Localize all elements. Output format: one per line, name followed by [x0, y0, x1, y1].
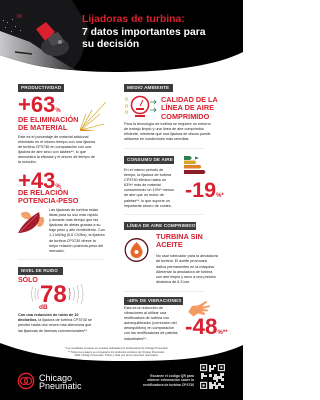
logo wordmark: Pneumatic	[39, 381, 82, 391]
footer notes: 2020 Chicago Pneumatic. Todos y cada uno de los derechos reservados.	[74, 354, 158, 357]
tag: -48% de vibraciones	[124, 297, 183, 305]
heading: de eliminación de material: DE ELIMINACIÓN	[18, 115, 78, 124]
footer notes: * Los resultados se basan en pruebas realizadas por el laboratorio de Chicago Pneumatic.	[65, 347, 168, 350]
logo: chicago pneumatic	[18, 372, 82, 391]
heading: de relación potencia-peso: DE RELACIÓN	[18, 188, 68, 197]
stat: +63%: +63%	[18, 92, 61, 117]
tag: consumo de aire	[124, 156, 174, 164]
text: productividad: de turbina CP3730 en comparación con una	[18, 145, 91, 149]
title	[82, 14, 206, 50]
text: potencia-peso: mejor relación potencia-peso del	[49, 244, 103, 248]
label: dB: dB	[39, 304, 48, 311]
qr caption: rectificadora de turbina CP3730	[143, 383, 194, 387]
qr caption: obtener información sobre la	[147, 378, 194, 382]
text: línea de aire comprimido: Alimentar la amoladora de turbina	[156, 270, 212, 274]
text: potencia-peso: listas para su uso más rápido	[49, 213, 98, 217]
text: productividad: demuestra la eficacia y el ahorro de tiempo de	[18, 155, 95, 159]
tag: medio ambiente: MEDIO AMBIENTE	[127, 85, 169, 90]
text: consumo de aire: importante ahorro de costes.	[124, 204, 172, 208]
text: medio ambiente	[124, 122, 211, 141]
text: vibraciones: rectificadora de turbina con	[124, 316, 169, 320]
text: consumo de aire: En el mismo periodo de	[124, 168, 163, 172]
text: potencia-peso: y durante más tiempo que las	[49, 218, 98, 222]
text: vibraciones: vibraciones al utilizar una	[124, 311, 166, 315]
text: nivel de ruido	[18, 313, 92, 333]
tag: consumo de aire: CONSUMO DE AIRE	[127, 157, 173, 162]
stat: -48%: -48%**	[185, 314, 228, 339]
text: consumo de aire: 63%* más de material	[124, 183, 161, 187]
icon: sparks	[80, 102, 106, 131]
heading: de relación potencia-peso: POTENCIA-PESO	[18, 196, 78, 205]
text: nivel de ruido: Con una reducción de ruido de 10	[18, 313, 78, 317]
qr code	[200, 364, 225, 389]
heading: calidad de la línea de aire comprimido	[161, 95, 218, 121]
icon: gauge	[124, 96, 156, 117]
text: medio ambiente: utilizarse en condiciones más sencillas.	[124, 137, 189, 141]
logo mark	[18, 372, 34, 390]
text: línea de aire comprimido: dinámica de 6,3 bar.	[156, 280, 190, 284]
text: nivel de ruido: decibelios, la lijadora de turbina CP3730 se	[18, 318, 92, 322]
panel: vibraciones	[124, 297, 228, 341]
title: su decisión	[82, 39, 139, 50]
logo wordmark: Chicago	[39, 373, 72, 383]
tag: medio ambiente	[124, 84, 173, 92]
stat: -19%: -19%*	[185, 178, 224, 202]
tag: línea de aire comprimido: LÍNEA DE AIRE COMPRIMIDO	[127, 223, 196, 228]
title: Lijadoras de turbina:	[82, 14, 185, 25]
text: productividad	[18, 135, 96, 164]
qr caption	[143, 374, 194, 387]
text: vibraciones: desequilibrio) en comparación	[124, 326, 174, 330]
icon: hand	[188, 300, 210, 316]
text: productividad: la solución.	[18, 160, 37, 164]
text: nivel de ruido: percibe hasta dos veces más silenciosa que	[18, 323, 91, 327]
text: productividad: eliminado en el mismo tiempo con una lijadora	[18, 140, 95, 144]
text: potencia-peso: mercado.	[49, 249, 65, 253]
text: línea de aire comprimido: daños permanentes en la máquina.	[156, 265, 215, 269]
heading: de eliminación de material	[18, 115, 78, 132]
icon: sound waves	[31, 284, 84, 304]
stat: +43%: +43%	[18, 168, 61, 193]
panel: consumo de aire	[124, 156, 224, 208]
text: línea de aire comprimido	[156, 254, 218, 284]
text: potencia-peso: lijadoras de aletas gracias a su	[49, 223, 100, 227]
icon: energy rating bars	[184, 156, 206, 174]
text: consumo de aire: CP3730 elimina hasta un	[124, 178, 166, 182]
panel: nivel de ruido	[18, 267, 92, 333]
panel: línea de aire comprimido	[124, 222, 218, 284]
text: nivel de ruido: las lijadoras de láminas convencionales**.	[18, 329, 88, 333]
text: vibraciones: Esta es la reducción de	[124, 306, 163, 310]
text: potencia-peso: de turbina CP3730 ofrece la	[49, 239, 96, 243]
text: potencia-peso: bajo peso y alto rendimiento. Con	[49, 228, 105, 232]
text: consumo de aire	[124, 168, 174, 208]
heading: de eliminación de material: DE MATERIAL	[18, 123, 67, 132]
title: 7 datos importantes para	[82, 26, 206, 38]
text: línea de aire comprimido: de turbina. El aceite provocará	[156, 259, 207, 263]
text: vibraciones	[124, 306, 178, 341]
tag: -48% de vibraciones: -48% DE VIBRACIONES	[127, 298, 181, 303]
tag: línea de aire comprimido	[124, 222, 196, 230]
stat: 78: 78	[40, 281, 67, 308]
text: consumo de aire: paletas**, lo que supone un	[124, 199, 170, 203]
panel: medio ambiente	[124, 84, 218, 141]
text: consumo de aire: de aire que un motor de	[124, 193, 164, 197]
icon: oil prohibited	[124, 238, 148, 262]
label: sólo: SÓLO	[18, 277, 38, 284]
tag: nivel de ruido: NIVEL DE RUIDO	[21, 268, 58, 273]
heading: calidad de la línea de aire comprimido: CALIDAD DE LA	[161, 95, 218, 104]
heading: turbina sin aceite	[156, 232, 203, 249]
tag: productividad: PRODUCTIVIDAD	[21, 85, 61, 90]
text: consumo de aire: tiempo, la lijadora de turbina	[124, 173, 171, 177]
footer band	[0, 343, 243, 400]
text: productividad: lijadora de aire seco con álabes**, lo que	[18, 150, 86, 154]
text: medio ambiente: de trabajo limpio y una línea de aire comprimido	[124, 127, 204, 131]
text: línea de aire comprimido: No usar lubricador para la amoladora	[156, 254, 218, 258]
text: medio ambiente: eficiente, mientras que una lijadora de discos puede	[124, 132, 211, 136]
tag: nivel de ruido	[18, 267, 63, 275]
icon: feather and arm	[18, 212, 44, 233]
heading: de relación potencia-peso	[18, 188, 78, 205]
text: potencia-peso: Las lijadoras de turbina están	[49, 208, 98, 212]
text: vibraciones: con las rectificadoras de paletas	[124, 331, 178, 335]
text: consumo de aire: consumiendo un 19%* menos	[124, 188, 174, 192]
text: línea de aire comprimido: con aire limpio y seco a una presión	[156, 275, 216, 279]
footer notes	[64, 347, 168, 357]
qr caption: Escanee el código QR para	[150, 374, 194, 378]
text: medio ambiente: Para la tecnología de turbina se requiere un entorno	[124, 122, 211, 126]
heading: calidad de la línea de aire comprimido: COMPRIMIDO	[161, 112, 209, 121]
text: productividad: Este es el porcentaje de material adicional	[18, 135, 88, 139]
heading: turbina sin aceite: ACEITE	[156, 240, 183, 249]
icon: turbine grinder tool	[36, 22, 69, 56]
heading: turbina sin aceite: TURBINA SIN	[156, 232, 203, 241]
panel: potencia-peso	[18, 168, 105, 253]
footer notes: ** Todos los ensayos se compararon los productos similares de Chicago Pneumatic.	[68, 350, 165, 354]
panel: productividad	[18, 84, 106, 164]
header banner	[0, 0, 243, 72]
logo wordmark	[39, 373, 82, 391]
heading: calidad de la línea de aire comprimido: LÍNEA DE AIRE	[161, 103, 214, 112]
tag: productividad	[18, 84, 64, 92]
text: vibraciones: industriales**.	[124, 337, 147, 341]
text: potencia-peso	[49, 208, 105, 253]
text: potencia-peso: 1,1 kW/kg (0,6 CV/lbs), la lijadora	[49, 233, 105, 237]
text: vibraciones: autoequilibrador (corrección del	[124, 321, 177, 325]
